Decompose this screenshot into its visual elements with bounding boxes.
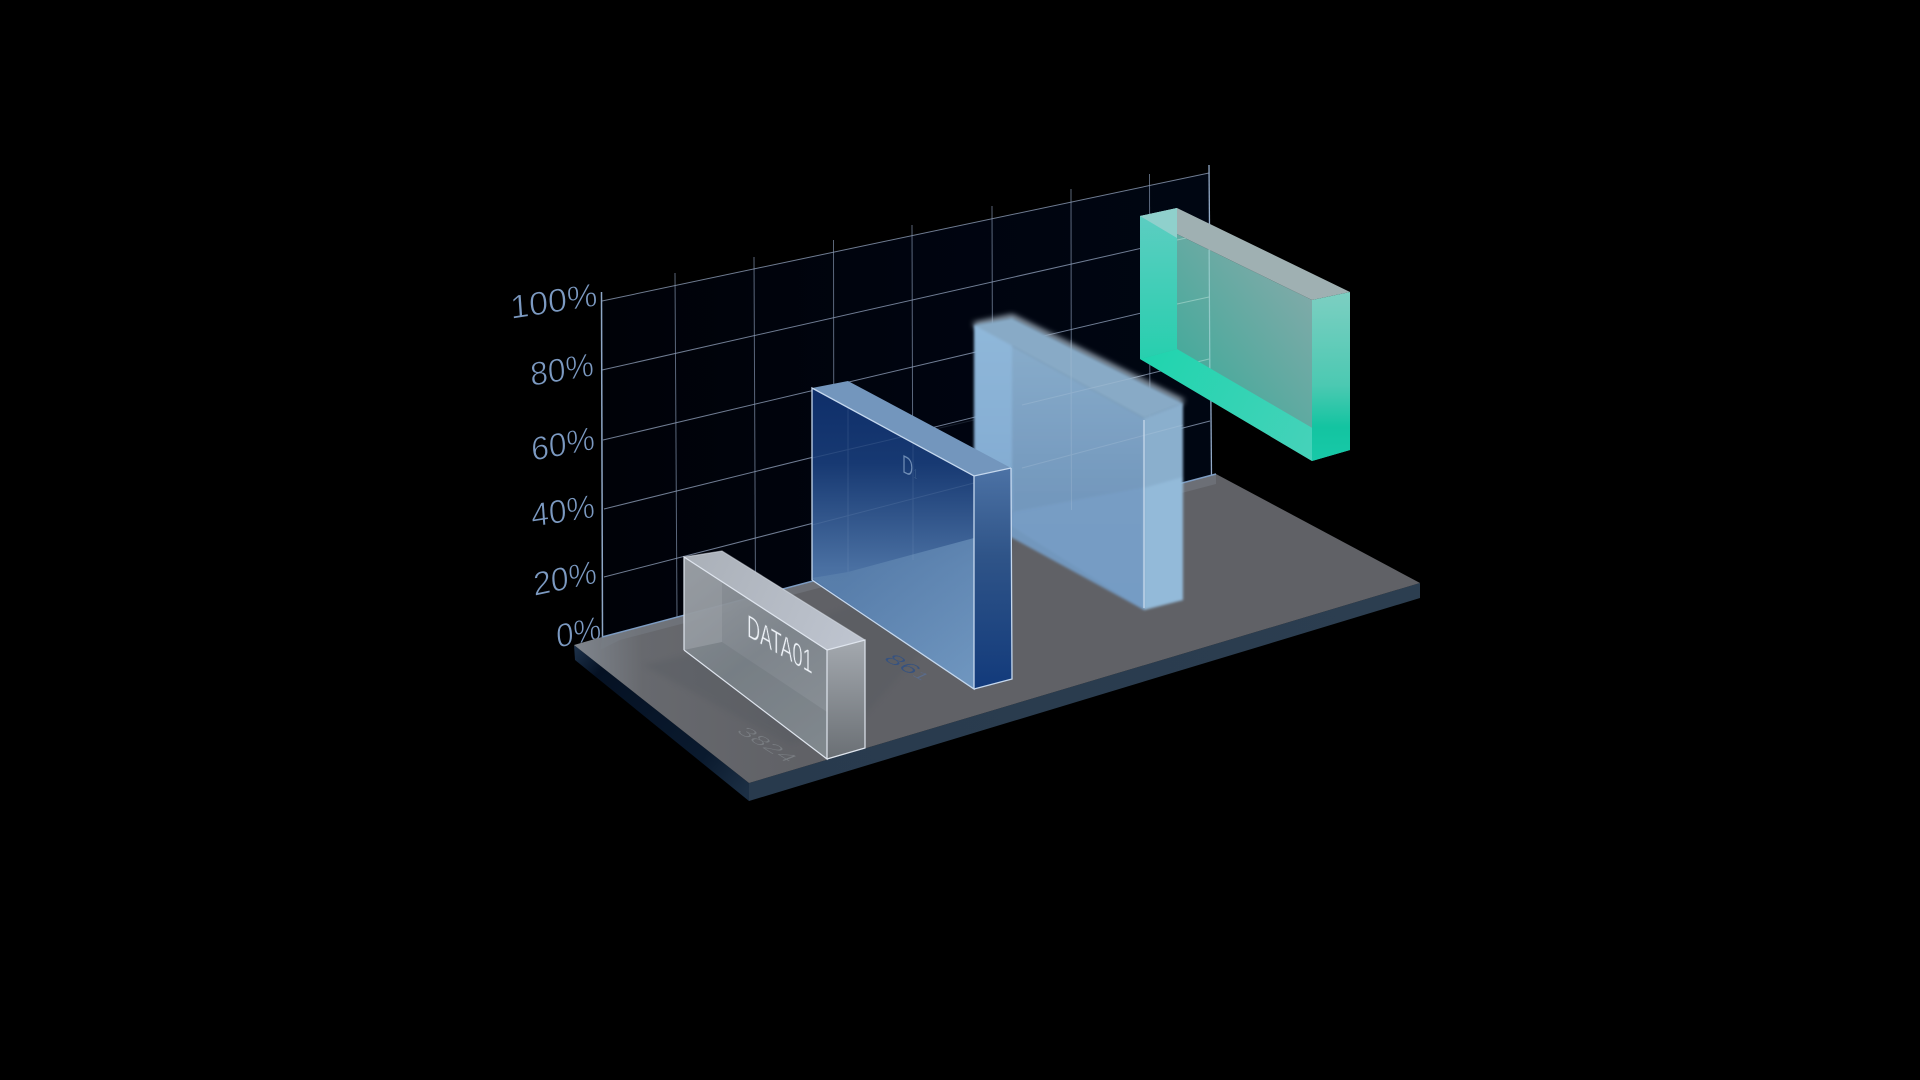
pale bar top face — [974, 318, 1183, 418]
teal bar right face — [1312, 292, 1350, 461]
grey bar front face — [684, 557, 827, 759]
bar: grey 20% — [684, 551, 865, 759]
pale bar right face — [1144, 403, 1183, 610]
floor value 3824: 3824 — [730, 725, 802, 765]
blue bar top face — [812, 381, 1011, 476]
label 20%: 20% — [532, 553, 598, 603]
label 40%: 40% — [530, 488, 596, 534]
grey bar label DATA01: DATA01 — [747, 608, 813, 681]
blue bar value label D: D1 — [902, 449, 918, 486]
bar: dark blue 60% — [812, 381, 1012, 689]
axis labels — [509, 276, 602, 655]
label 60%: 60% — [530, 419, 596, 468]
teal bar front face — [1140, 216, 1312, 461]
pale bar front face — [974, 325, 1144, 610]
blue bar floor reflection — [812, 538, 974, 689]
pale bar floor reflection — [1010, 480, 1183, 610]
label 80%: 80% — [529, 345, 595, 393]
teal bar left inner strip — [1140, 208, 1177, 359]
grey bar right face — [827, 640, 865, 759]
floor platform — [574, 474, 1420, 801]
floor right side — [749, 583, 1420, 801]
label 100%: 100% — [509, 276, 598, 327]
grey bar top face — [684, 551, 865, 650]
floor value 861: 861 — [878, 652, 938, 683]
floor left side — [574, 645, 749, 801]
blue bar front face — [812, 388, 974, 689]
bar: pale blue 80% — [974, 317, 1183, 610]
pale bar left inner strip — [974, 318, 1012, 517]
teal bar bottom face — [1140, 349, 1350, 461]
floor top — [574, 474, 1420, 783]
bar: teal 100% — [1140, 208, 1350, 461]
teal bar top face — [1140, 208, 1350, 300]
back wall with grid — [602, 165, 1212, 638]
label 0%: 0% — [555, 609, 602, 655]
blue bar right face — [974, 468, 1012, 689]
